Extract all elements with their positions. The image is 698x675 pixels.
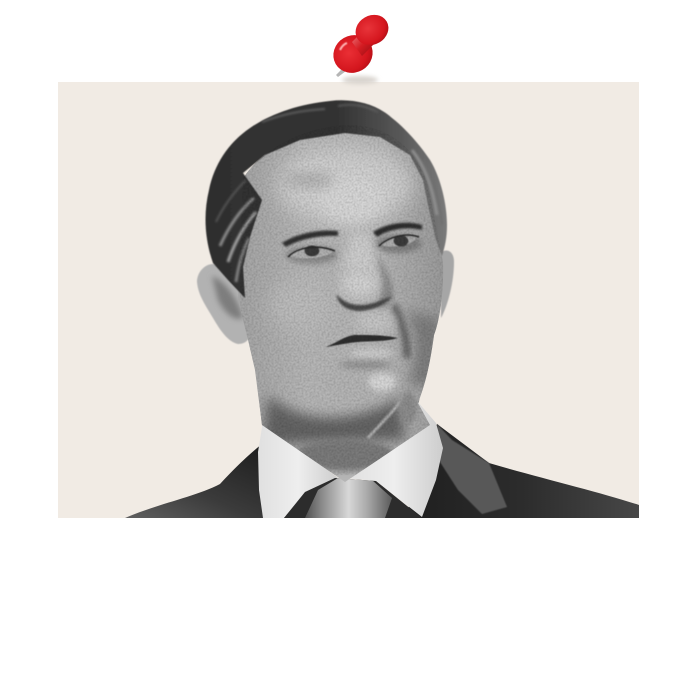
right eyebrow <box>373 223 422 237</box>
skin grain <box>240 125 445 475</box>
forehead spots <box>282 173 334 187</box>
cheek highlight <box>274 291 298 320</box>
shirt collar <box>258 402 443 518</box>
right jaw shadow <box>405 310 442 385</box>
chin highlight <box>368 373 396 391</box>
face <box>238 132 443 482</box>
icon: red push pin <box>326 9 394 84</box>
ear left <box>197 264 249 344</box>
ear left shading <box>212 276 243 319</box>
pin highlights <box>340 43 347 50</box>
pin needle <box>336 68 346 77</box>
neck lower tone <box>295 439 395 471</box>
forehead highlight <box>277 147 413 223</box>
portrait figure <box>125 100 639 520</box>
jacket <box>125 424 639 518</box>
nasolabial fold <box>394 305 407 358</box>
forehead centre light <box>331 203 378 226</box>
eye socket shadows <box>286 246 338 264</box>
ear right <box>441 250 454 318</box>
tie <box>284 478 422 518</box>
mouth <box>326 335 398 347</box>
neck <box>260 399 420 426</box>
background panel <box>58 82 639 518</box>
left eyebrow <box>282 231 338 247</box>
pin shaft <box>352 30 376 56</box>
hair <box>206 100 447 298</box>
nose <box>336 250 393 311</box>
right eye <box>379 235 419 247</box>
pin head <box>350 9 394 51</box>
hair side grey streaks <box>216 105 442 282</box>
chin <box>322 358 398 398</box>
neck crease <box>368 396 404 438</box>
left eye <box>288 246 335 259</box>
pin base <box>326 28 380 80</box>
portrait infographic <box>58 14 639 518</box>
neck shadow <box>262 395 405 445</box>
nose bridge highlight <box>342 232 380 272</box>
jacket lapel <box>437 424 507 514</box>
pin shadow <box>342 76 378 84</box>
